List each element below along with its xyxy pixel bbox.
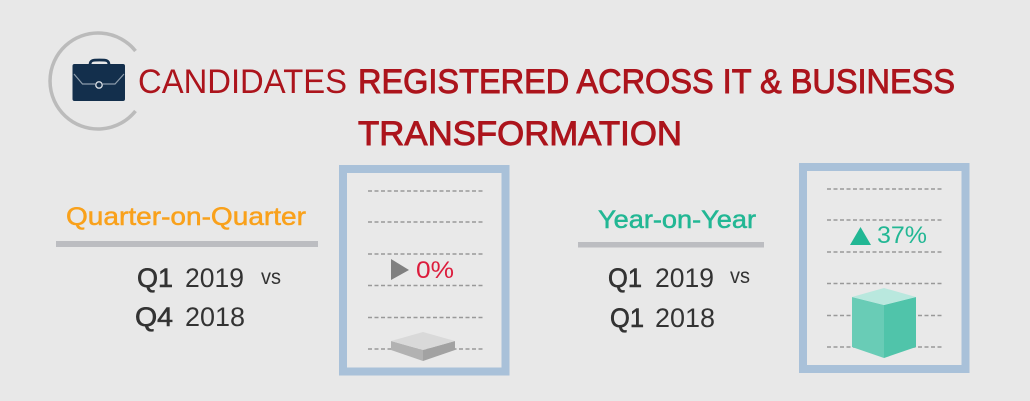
period labels: Q1 [137, 263, 173, 293]
icon: briefcase in ring [50, 33, 136, 129]
title [138, 63, 955, 153]
period labels: 2018 [655, 303, 715, 333]
icon: flat arrow [391, 259, 409, 280]
value: 37%: 37% [877, 222, 927, 249]
icon: up arrow [850, 227, 871, 245]
divider bar [56, 241, 318, 247]
period labels: vs [261, 266, 281, 289]
chart: quarter-on-quarter 0% [343, 169, 506, 372]
period labels: Q4 [135, 302, 173, 332]
heading: Year-on-Year: Year-on-Year [598, 206, 756, 234]
title: REGISTERED ACROSS IT & BUSINESS [358, 63, 955, 101]
title: TRANSFORMATION [358, 115, 682, 153]
value: 0%: 0% [416, 257, 454, 284]
period labels: 2019 [185, 263, 244, 293]
period labels: Q1 [610, 303, 644, 333]
period labels: vs [730, 265, 750, 288]
period labels: Q1 [608, 263, 642, 293]
heading: Quarter-on-Quarter: Quarter-on-Quarter [66, 203, 306, 231]
period labels: 2019 [655, 263, 714, 293]
panel: quarter-on-quarter comparison [56, 203, 318, 332]
cube bar [852, 288, 916, 358]
period labels [135, 263, 281, 332]
title: CANDIDATES [138, 63, 347, 101]
period labels [608, 263, 750, 333]
flat slab [391, 332, 455, 361]
chart: year-on-year 37% [803, 167, 966, 369]
panel: year-on-year comparison [578, 206, 764, 333]
period labels: 2018 [185, 302, 245, 332]
divider bar [578, 242, 764, 248]
